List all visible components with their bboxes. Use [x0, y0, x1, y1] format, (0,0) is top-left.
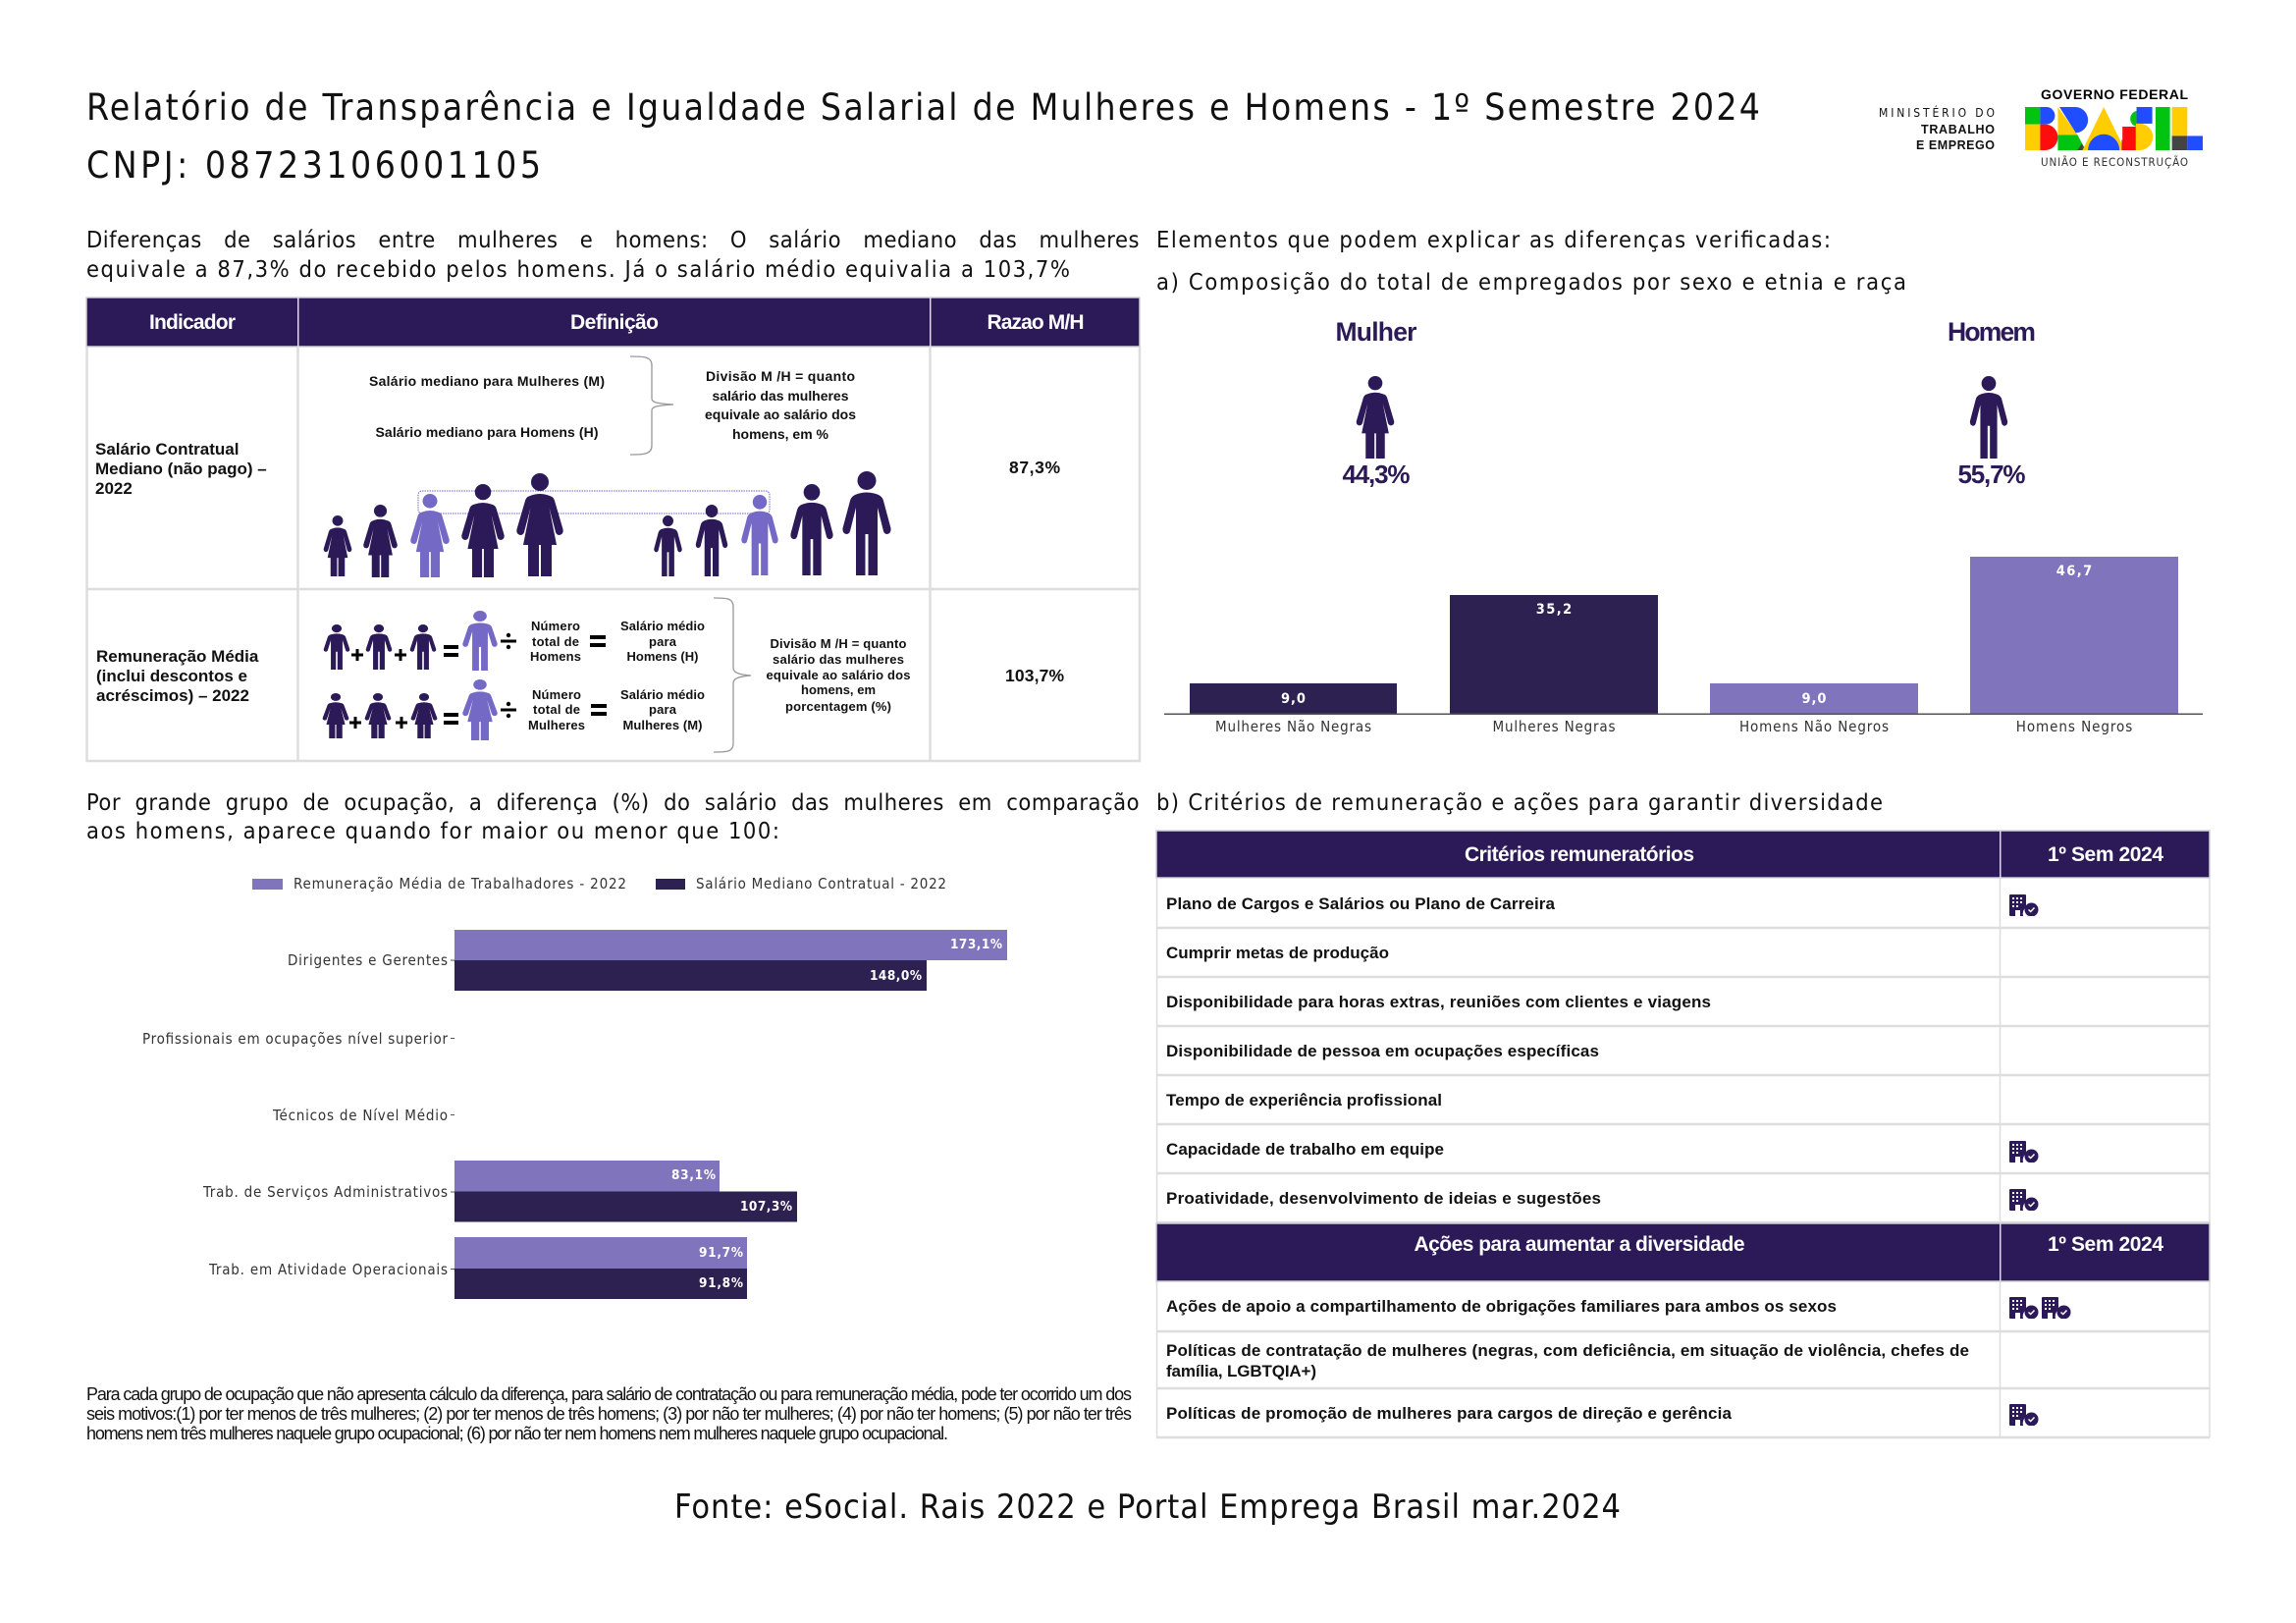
bar chart: composition by sex and race: Homens Negros — [2016, 718, 2132, 735]
table grid — [1156, 878, 2210, 1437]
row label: salário contratual mediano: 2022 — [95, 479, 133, 498]
action rows — [1166, 1297, 1969, 1423]
title — [86, 86, 1760, 187]
criteria rows: Proatividade, desenvolvimento de ideias e sugestões — [1166, 1189, 1601, 1208]
row label: remuneração média: acréscimos) – 2022 — [96, 686, 249, 705]
heading: criteria: b) Critérios de remuneração e ações para garantir diversidade — [1156, 788, 1883, 816]
action rows: Políticas de contratação de mulheres (negras, com deficiência, em situação de violência, chefes de — [1166, 1341, 1969, 1360]
formula: women average: Salário médio — [620, 687, 705, 702]
footnote — [86, 1384, 1132, 1443]
title: CNPJ: 08723106001105 — [86, 144, 541, 187]
action rows: família, LGBTQIA+) — [1166, 1362, 1316, 1380]
bar chart: composition by sex and race: 46,7 — [2056, 564, 2092, 579]
footnote: homens nem três mulheres naquele grupo ocupacional; (6) por não ter nem homens nem mulheres naquele grupo ocupacional. — [86, 1424, 948, 1443]
row label: salário contratual mediano — [95, 440, 267, 498]
bar chart: pay ratio by occupation: 91,7% — [699, 1245, 743, 1261]
row label: remuneração média — [96, 647, 259, 705]
formula: women average: para — [649, 702, 677, 717]
bar chart: pay ratio by occupation: Trab. de Serviços Administrativos — [202, 1183, 448, 1201]
explanation: divisão M/H average — [766, 636, 911, 714]
criteria rows: Capacidade de trabalho em equipe — [1166, 1140, 1444, 1159]
header: ações para aumentar a diversidade: 1º Sem 2024 — [2048, 1233, 2163, 1256]
formula text: salário mediano: Salário mediano para Mulheres (M) — [369, 373, 605, 389]
formula text: salário mediano — [369, 373, 605, 440]
header: critérios remuneratórios — [1156, 831, 2210, 878]
logo: governo federal brasil — [2025, 86, 2203, 169]
bar chart: pay ratio by occupation: 91,8% — [699, 1275, 743, 1291]
table grid — [86, 347, 1140, 761]
brace: median — [630, 356, 673, 455]
action rows: Políticas de promoção de mulheres para cargos de direção e gerência — [1166, 1404, 1733, 1423]
bar chart: pay ratio by occupation: Técnicos de Nível Médio — [272, 1107, 448, 1124]
formula: women average: Mulheres — [528, 718, 585, 732]
explanation: divisão M/H median — [705, 368, 856, 442]
brace: average — [714, 598, 751, 752]
formula: women average: Mulheres (M) — [622, 718, 703, 732]
criteria rows: Disponibilidade de pessoa em ocupações específicas — [1166, 1042, 1599, 1060]
criteria rows: Plano de Cargos e Salários ou Plano de Carreira — [1166, 894, 1556, 913]
row value: 103,7%: 103,7% — [1005, 666, 1064, 685]
heading: salary differences (second line): equivale a 87,3% do recebido pelos homens. Já o salário médio equivalia a 103,7% — [86, 255, 1070, 283]
bar chart: composition by sex and race: 9,0 — [1281, 691, 1306, 707]
header: ações para aumentar a diversidade — [1156, 1223, 2210, 1281]
bar chart: pay ratio by occupation: 83,1% — [671, 1167, 716, 1183]
bar chart: composition by sex and race: 35,2 — [1536, 602, 1572, 618]
bar chart: pay ratio by occupation: Profissionais em ocupações nível superior — [142, 1030, 448, 1048]
bar chart: pay ratio by occupation — [142, 930, 1007, 1299]
source line: Fonte: eSocial. Rais 2022 e Portal Emprega Brasil mar.2024 — [674, 1488, 1621, 1527]
explanation: divisão M/H median: equivale ao salário dos — [705, 406, 856, 422]
legend — [252, 875, 946, 893]
text block: salary differences: Diferenças de salários entre mulheres e homens: O salário mediano das mulheres — [86, 226, 1140, 253]
stat: mulher 44,3% — [1335, 317, 1417, 489]
footnote: seis motivos:(1) por ter menos de três mulheres; (2) por ter menos de três homens; (3) por não ter mulheres; (4) por não ter homens; (5) por não ter três — [86, 1404, 1132, 1424]
formula: men average: total de — [532, 634, 579, 649]
table header: indicador, definição, razão: Razao M/H — [988, 311, 1084, 334]
bar chart: composition by sex and race: 9,0 — [1802, 691, 1826, 707]
heading: occupation (second line): aos homens, aparece quando for maior ou menor que 100: — [86, 817, 779, 844]
formula: men average: Número — [531, 619, 580, 633]
stat: homem 55,7%: 55,7% — [1957, 460, 2026, 489]
stat: homem 55,7%: Homem — [1948, 317, 2036, 347]
bar chart: pay ratio by occupation: 173,1% — [950, 937, 1002, 952]
formula text: salário mediano: Salário mediano para Homens (H) — [375, 424, 599, 440]
icons: action checks — [2009, 1297, 2071, 1426]
bar chart: pay ratio by occupation: 148,0% — [870, 968, 922, 984]
panel: indicator definition table — [86, 298, 1140, 761]
panel: criteria table — [1156, 831, 2210, 1437]
table header: indicador, definição, razão: Definição — [570, 311, 659, 334]
heading: composition: Elementos que podem explicar as diferenças verificadas: — [1156, 226, 1831, 253]
formula: men average: para — [649, 634, 677, 649]
row label: remuneração média: Remuneração Média — [96, 647, 259, 666]
bar chart: composition by sex and race: Mulheres Negras — [1492, 718, 1616, 735]
title: Relatório de Transparência e Igualdade Salarial de Mulheres e Homens - 1º Semestre 2024 — [86, 86, 1760, 129]
bar chart: composition by sex and race: Homens Não Negros — [1739, 718, 1889, 735]
header: critérios remuneratórios: Critérios remuneratórios — [1465, 843, 1694, 866]
bar chart: pay ratio by occupation: 107,3% — [740, 1199, 792, 1215]
row label: salário contratual mediano: Mediano (não pago) – — [95, 460, 267, 478]
action rows: Ações de apoio a compartilhamento de obrigações familiares para ambos os sexos — [1166, 1297, 1837, 1316]
explanation: divisão M/H median: homens, em % — [732, 426, 829, 442]
row value: 87,3%: 87,3% — [1009, 458, 1060, 477]
stat: homem 55,7% — [1948, 317, 2036, 489]
icons: company check — [2009, 894, 2038, 1212]
formula: women average: Número — [532, 687, 581, 702]
bar chart: pay ratio by occupation: Trab. em Atividade Operacionais — [208, 1261, 448, 1278]
legend: Remuneração Média de Trabalhadores - 2022 — [294, 875, 626, 893]
explanation: divisão M/H median: Divisão M /H = quanto — [706, 368, 855, 384]
explanation: divisão M/H average: Divisão M /H = quanto — [770, 636, 907, 651]
panel: sex shares — [1335, 317, 2036, 489]
heading: composition: a) Composição do total de empregados por sexo e etnia e raça — [1156, 268, 1906, 296]
explanation: divisão M/H average: salário das mulheres — [773, 652, 904, 667]
formula: women average: total de — [533, 702, 580, 717]
footnote: Para cada grupo de ocupação que não apresenta cálculo da diferença, para salário de contratação ou para remuneração média, pode ter ocorrido um dos — [86, 1384, 1132, 1404]
logo: ministério: MINISTÉRIO DO — [1879, 105, 1995, 120]
criteria rows: Tempo de experiência profissional — [1166, 1091, 1442, 1109]
explanation: divisão M/H average: porcentagem (%) — [785, 699, 891, 714]
stat: mulher 44,3%: 44,3% — [1343, 460, 1410, 489]
text block: occupation heading: Por grande grupo de ocupação, a diferença (%) do salário das mulheres em comparação — [86, 788, 1140, 816]
header: critérios remuneratórios: 1º Sem 2024 — [2048, 843, 2163, 866]
explanation: divisão M/H average: homens, em — [801, 682, 876, 697]
bar chart: composition by sex and race — [1164, 557, 2203, 735]
bar chart: pay ratio by occupation: Dirigentes e Gerentes — [288, 951, 448, 969]
explanation: divisão M/H average: equivale ao salário dos — [766, 668, 911, 682]
median highlight box — [418, 491, 770, 514]
formula: women average — [323, 679, 705, 740]
heading: composition — [1156, 226, 1906, 296]
explanation: divisão M/H median: salário das mulheres — [713, 388, 849, 404]
row label: salário contratual mediano: Salário Contratual — [95, 440, 239, 459]
formula: men average: Salário médio — [620, 619, 705, 633]
row label: remuneração média: (inclui descontos e — [96, 667, 247, 685]
bar chart: composition by sex and race: Mulheres Não Negras — [1215, 718, 1371, 735]
icons: women ordered by salary — [324, 473, 563, 577]
stat: mulher 44,3%: Mulher — [1335, 317, 1417, 347]
logo: ministério: E EMPREGO — [1916, 138, 1995, 152]
criteria rows — [1166, 894, 1711, 1208]
logo: governo federal brasil: GOVERNO FEDERAL — [2041, 86, 2188, 102]
criteria rows: Disponibilidade para horas extras, reuniões com clientes e viagens — [1166, 993, 1711, 1011]
header: ações para aumentar a diversidade: Ações para aumentar a diversidade — [1414, 1233, 1745, 1256]
formula: men average: Homens (H) — [626, 649, 699, 664]
formula: men average — [324, 611, 705, 671]
formula: men average: Homens — [530, 649, 581, 664]
table header: indicador, definição, razão: Indicador — [149, 311, 236, 334]
criteria rows: Cumprir metas de produção — [1166, 944, 1389, 962]
icons: men ordered by salary — [654, 471, 891, 576]
table header: indicador, definição, razão — [86, 298, 1140, 347]
logo: ministério: TRABALHO — [1921, 123, 1995, 136]
logo: governo federal brasil: UNIÃO E RECONSTRUÇÃO — [2041, 154, 2188, 169]
logo: ministério — [1879, 105, 1995, 152]
legend: Salário Mediano Contratual - 2022 — [696, 875, 946, 893]
